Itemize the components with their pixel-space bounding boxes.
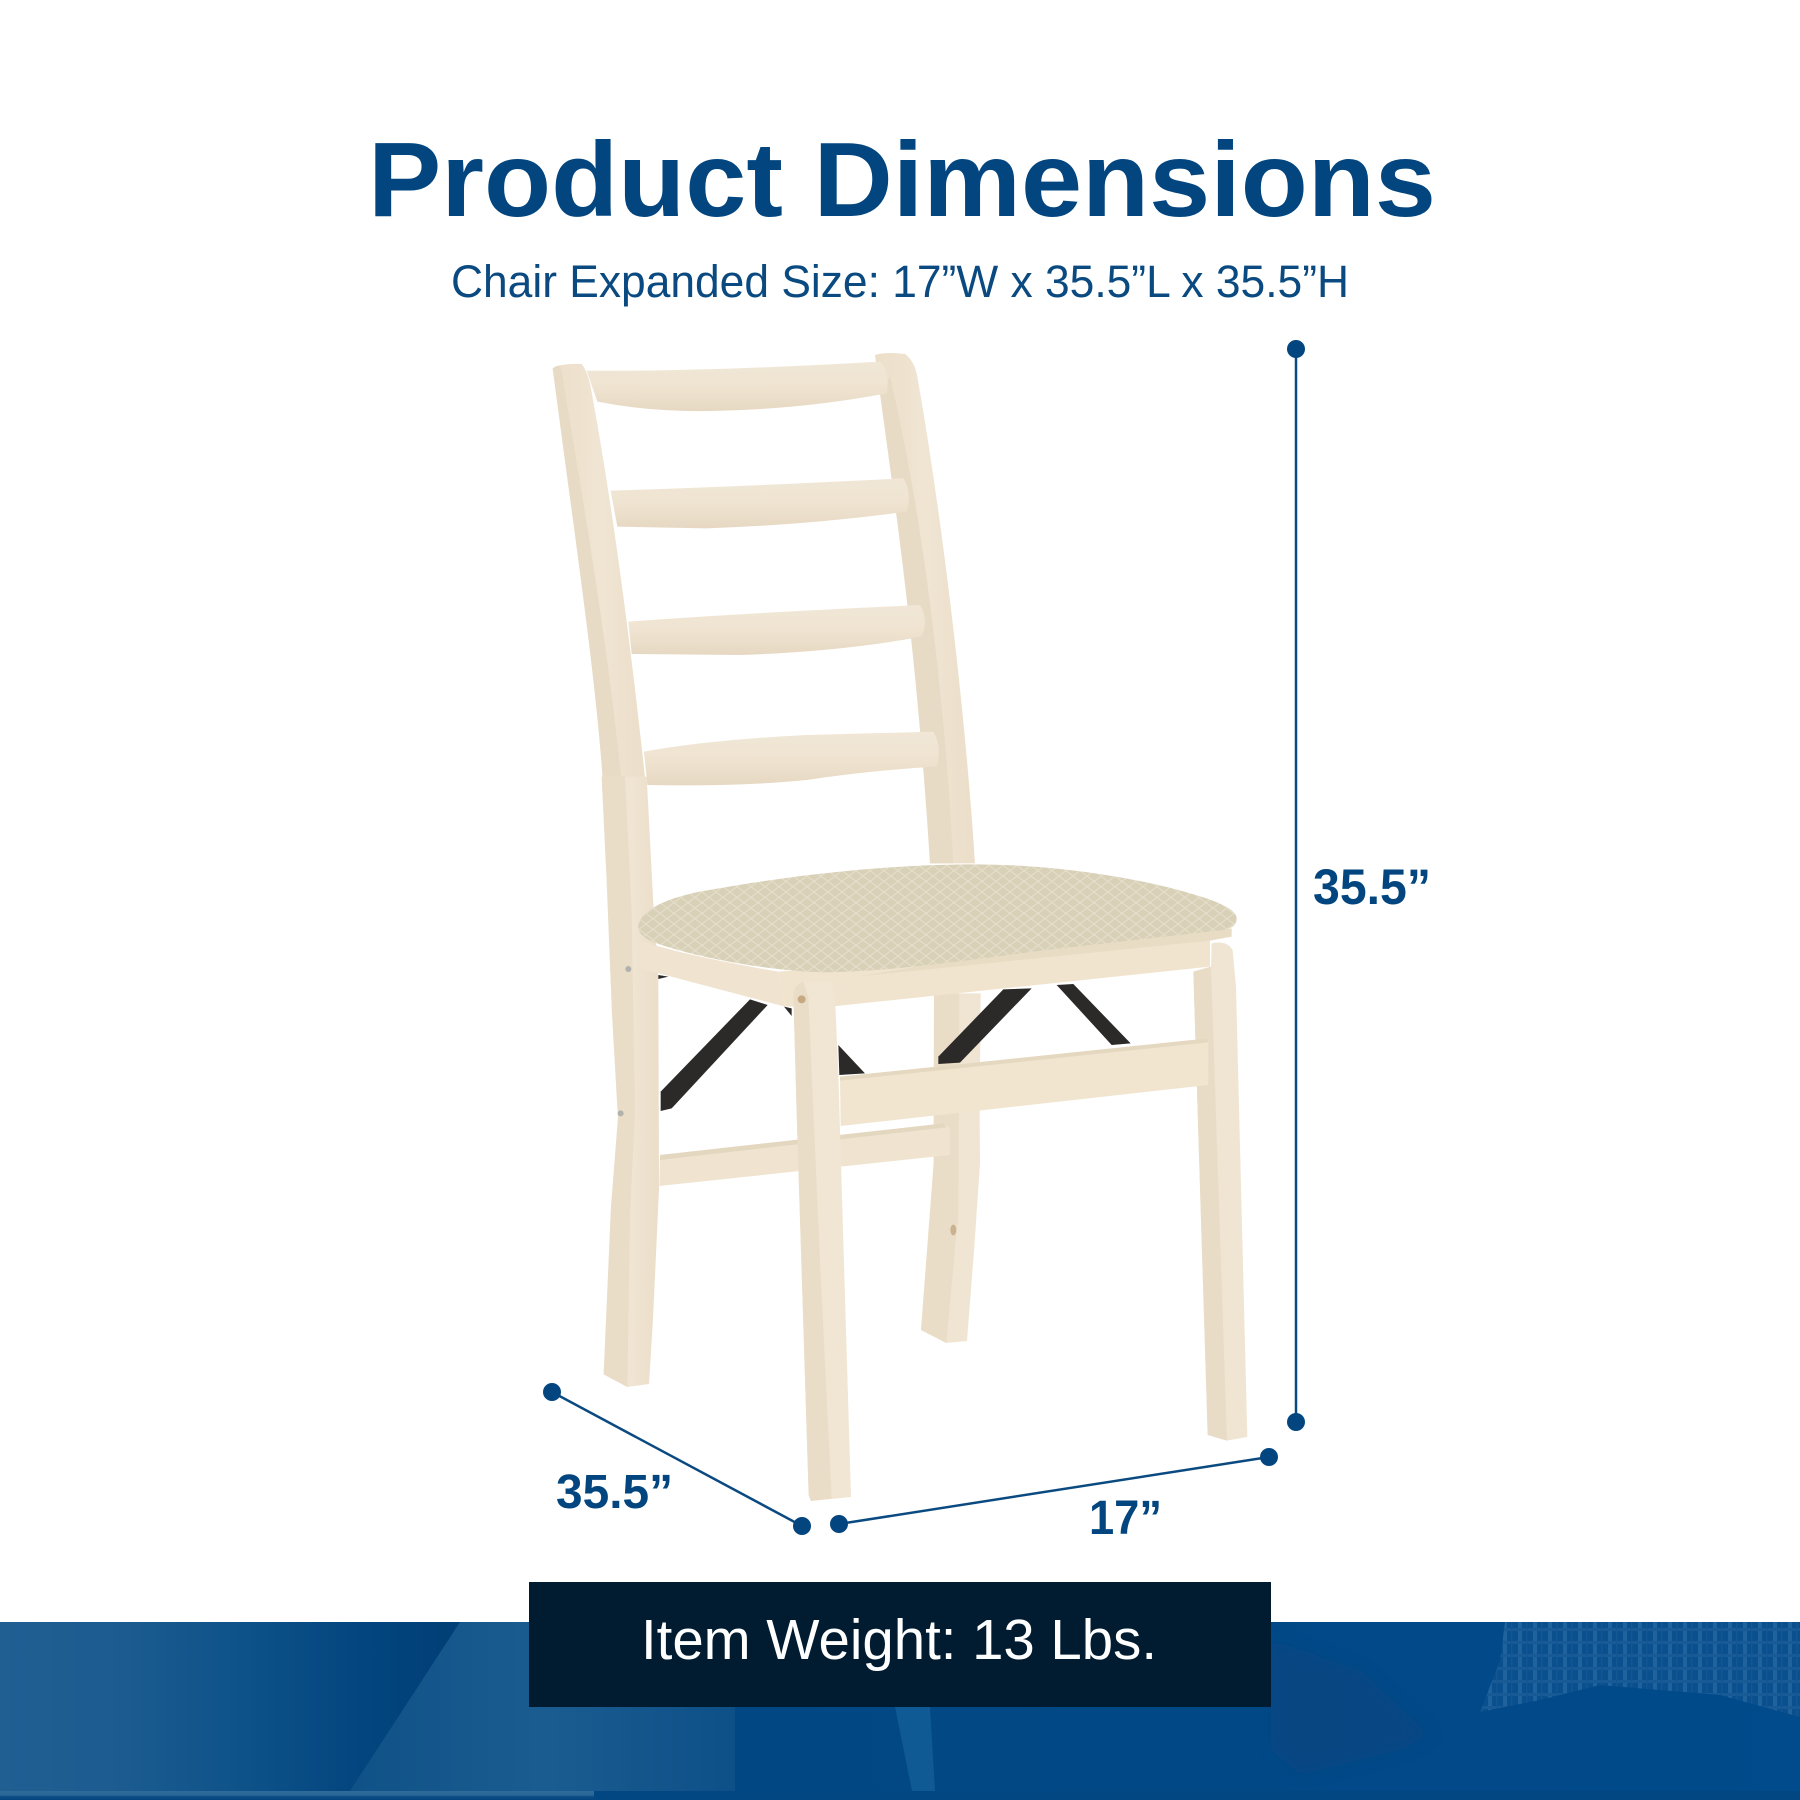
dimension: length xyxy=(543,1383,811,1535)
chair back: posts and ladder rails xyxy=(553,353,975,863)
rear left post xyxy=(602,777,659,1387)
metal folding braces xyxy=(658,975,1131,1111)
dimension: width: 17” xyxy=(1089,1492,1162,1545)
dimension: height: 35.5” xyxy=(1313,859,1431,915)
chair base: legs, braces, seat xyxy=(602,777,1247,1501)
item weight box: Item Weight: 13 Lbs. xyxy=(641,1608,1157,1672)
rear right leg xyxy=(921,993,981,1343)
right back post xyxy=(875,353,975,863)
rear stretcher xyxy=(659,1123,950,1186)
front right leg xyxy=(1193,942,1247,1441)
screws xyxy=(618,966,631,1116)
dimension: length: 35.5” xyxy=(556,1466,673,1519)
item weight box xyxy=(529,1582,1271,1707)
seat cushion xyxy=(638,864,1237,972)
left back post xyxy=(553,364,647,817)
dimension: width xyxy=(830,1448,1278,1545)
subtitle: chair expanded size: Chair Expanded Size: 17”W x 35.5”L x 35.5”H xyxy=(451,256,1349,307)
front left leg xyxy=(793,982,851,1501)
dimension: height xyxy=(1287,340,1431,1431)
chair illustration xyxy=(553,353,1247,1501)
blue photo banner xyxy=(0,1622,1800,1800)
seat apron xyxy=(640,928,1232,1007)
ladder rails xyxy=(587,362,939,785)
title: Product Dimensions xyxy=(368,121,1436,239)
front stretcher xyxy=(840,1038,1208,1126)
